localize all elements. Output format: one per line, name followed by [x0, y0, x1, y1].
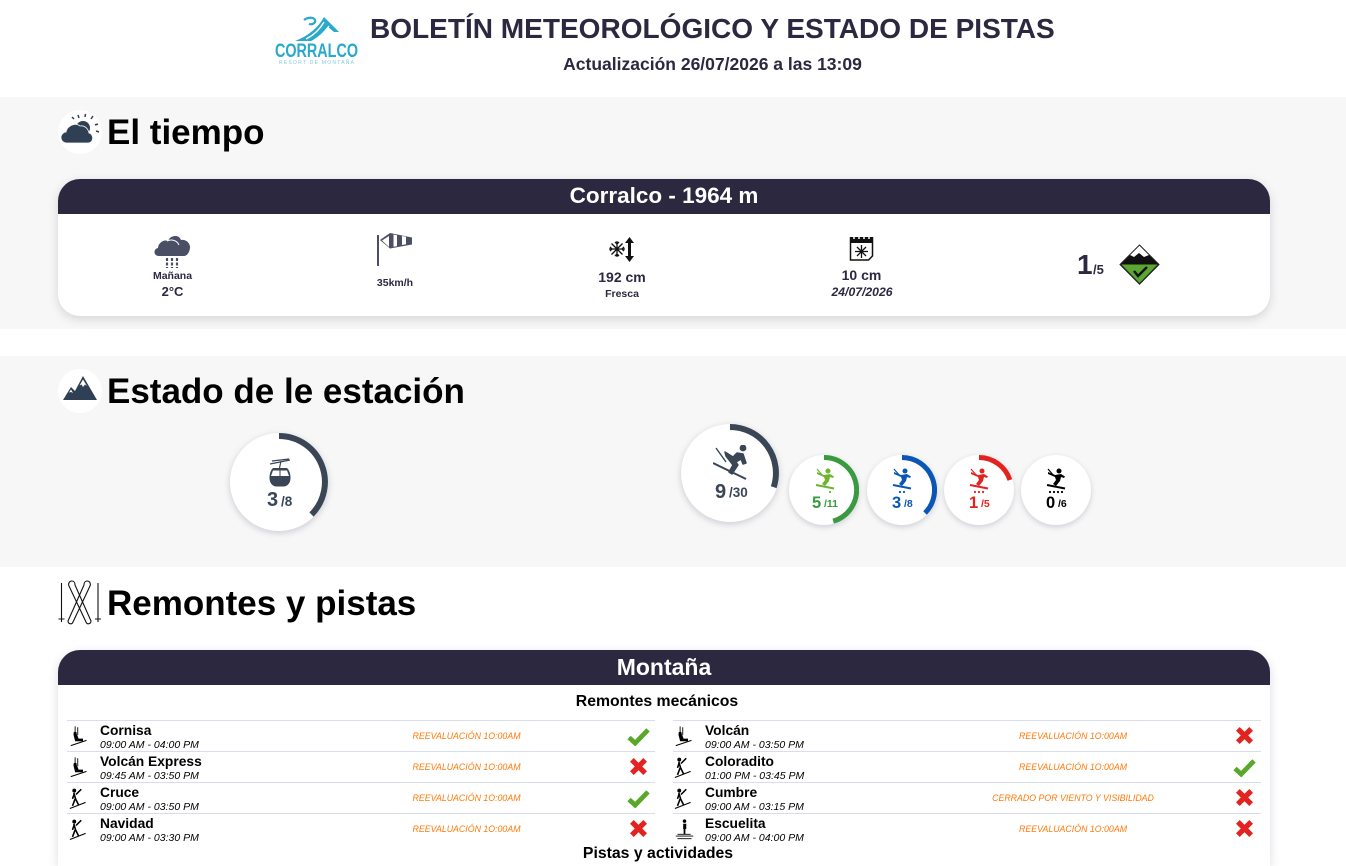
forecast label: Mañana — [153, 270, 192, 282]
red value: 1 — [969, 494, 978, 512]
icon: skier — [713, 445, 747, 480]
icon: black skier — [1046, 468, 1066, 494]
lift row: Escuelita: REEVALUACIÓN 1O:00AM — [1019, 824, 1127, 834]
lift row: Cumbre — [674, 785, 1253, 812]
logo — [275, 16, 358, 66]
wind speed: 35km/h — [377, 277, 413, 289]
lift row: Cornisa: Cornisa — [100, 723, 151, 738]
snow depth value: 192 cm — [598, 269, 646, 285]
red total: /5 — [981, 498, 990, 510]
temperature: 2°C — [162, 284, 183, 299]
heading: weather: El tiempo — [107, 113, 265, 152]
lift row: Volcán Express: Volcán Express — [100, 754, 202, 769]
icon: snow depth — [609, 237, 634, 262]
card header — [58, 179, 1270, 214]
icon: mountains — [63, 376, 97, 400]
icon: rain cloud — [154, 236, 190, 268]
card title: Montaña — [617, 654, 711, 680]
subheading: lifts: Remontes mecánicos — [576, 693, 738, 710]
lift row: Volcán: Volcán — [705, 723, 749, 738]
lift row: Cornisa — [70, 723, 650, 750]
lift row: Cruce: 09:00 AM - 03:50 PM — [100, 800, 199, 812]
lift row: Cornisa: REEVALUACIÓN 1O:00AM — [412, 730, 521, 740]
lift row: Cruce: REEVALUACIÓN 1O:00AM — [412, 792, 521, 802]
logo: CORRALCO — [275, 41, 358, 62]
title: BOLETÍN METEOROLÓGICO Y ESTADO DE PISTAS — [370, 13, 1055, 44]
lift row: Volcán Express — [70, 754, 647, 782]
update date: Actualización 26/07/2026 a las 13:09 — [563, 54, 862, 74]
lift row: Volcán: 09:00 AM - 03:50 PM — [705, 738, 804, 750]
runs total: /30 — [729, 485, 748, 500]
lift row: Coloradito: REEVALUACIÓN 1O:00AM — [1019, 762, 1127, 772]
lift row: Cumbre: 09:00 AM - 03:15 PM — [705, 800, 804, 812]
heading: station status: Estado de le estación — [107, 372, 465, 411]
lift row: Volcán: REEVALUACIÓN 1O:00AM — [1019, 730, 1127, 740]
gauge: red runs — [944, 455, 1014, 525]
snow type: Fresca — [605, 288, 639, 300]
lift row: Coloradito: Coloradito — [705, 754, 774, 769]
lift row: Cornisa: 09:00 AM - 04:00 PM — [100, 738, 199, 750]
lift row: Coloradito: 01:00 PM - 03:45 PM — [705, 770, 804, 782]
card title: Corralco - 1964 m — [570, 183, 758, 208]
lift row: Coloradito — [674, 754, 1256, 782]
gauge: lifts — [230, 433, 328, 531]
green total: /11 — [824, 498, 838, 510]
lift row: Escuelita: 09:00 AM - 04:00 PM — [705, 832, 804, 844]
icon: snow calendar — [850, 237, 874, 261]
panel: weather background — [0, 97, 1346, 329]
icon: windsock — [377, 233, 412, 266]
icon: blue skier — [892, 468, 912, 494]
subheading: runs and activities: Pistas y actividades — [583, 844, 733, 862]
lift row: Volcán — [676, 723, 1253, 750]
logo: RESORT DE MONTAÑA — [279, 59, 355, 66]
gauge: green runs — [789, 455, 859, 525]
blue total: /8 — [904, 498, 913, 510]
black total: /6 — [1058, 498, 1067, 510]
icon: green skier — [816, 468, 834, 494]
lift row: Volcán Express: REEVALUACIÓN 1O:00AM — [412, 762, 521, 772]
new snow value: 10 cm — [842, 267, 881, 283]
icon: gondola — [270, 458, 290, 486]
lift row: Volcán Express: 09:45 AM - 03:50 PM — [100, 770, 199, 782]
lift row: Escuelita: Escuelita — [705, 816, 766, 831]
gauge: blue runs — [867, 455, 937, 525]
lift row: Cruce: Cruce — [100, 785, 139, 800]
lift row: Cumbre: CERRADO POR VIENTO Y VISIBILIDAD — [992, 792, 1154, 802]
lift row: Navidad: Navidad — [100, 816, 154, 831]
gauge: black runs — [1021, 455, 1091, 525]
lift row: Escuelita — [676, 816, 1253, 844]
icon: crossed skis — [58, 580, 101, 624]
avalanche risk value: 1 — [1077, 248, 1093, 280]
lift row: Cumbre: Cumbre — [705, 785, 757, 800]
gauge: all runs — [681, 424, 779, 522]
green value: 5 — [812, 494, 821, 512]
panel: mountain card — [58, 650, 1270, 866]
lift row: Cruce — [70, 785, 650, 812]
lifts open value: 3 — [267, 489, 278, 511]
new snow date: 24/07/2026 — [832, 285, 892, 299]
black value: 0 — [1046, 494, 1055, 512]
panel: Corralco weather card — [58, 179, 1270, 316]
heading: lifts and runs: Remontes y pistas — [107, 584, 416, 623]
avalanche risk scale: /5 — [1093, 262, 1104, 277]
lift row: Navidad: 09:00 AM - 03:30 PM — [100, 832, 199, 844]
icon: sun and cloud — [61, 114, 100, 143]
panel: station status background — [0, 356, 1346, 567]
lift row: Navidad — [70, 816, 647, 844]
card header — [58, 650, 1270, 685]
lift row: Navidad: REEVALUACIÓN 1O:00AM — [412, 824, 521, 834]
icon: avalanche risk diamond — [1119, 244, 1160, 285]
icon: red skier — [970, 468, 988, 494]
blue value: 3 — [892, 494, 901, 512]
runs open value: 9 — [715, 481, 726, 503]
lifts total: /8 — [281, 494, 292, 509]
